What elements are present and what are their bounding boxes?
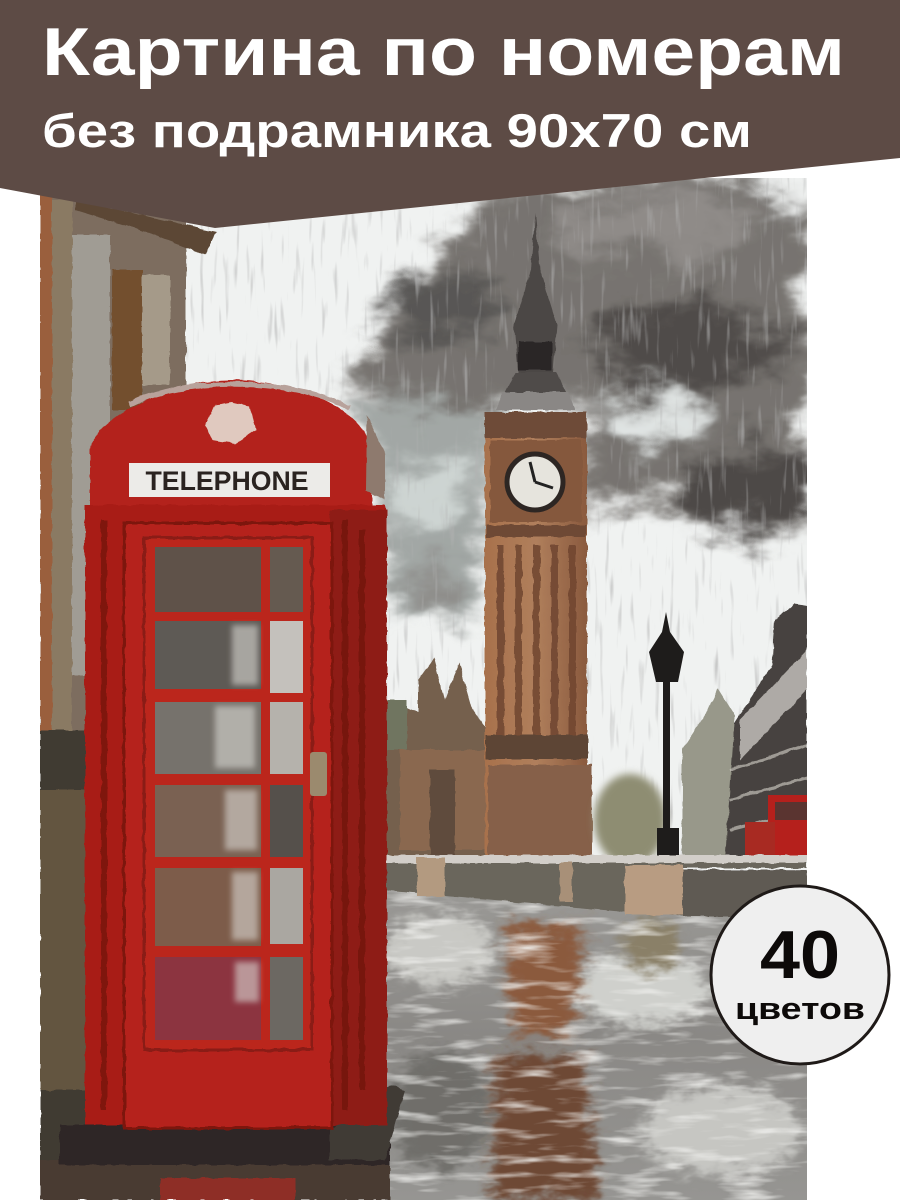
red telephone box	[40, 380, 405, 1200]
Big Ben tower	[485, 213, 592, 857]
window panes	[155, 547, 303, 1040]
title: Картина по номерам	[42, 14, 845, 90]
street lamp	[649, 612, 684, 860]
box base	[40, 1085, 405, 1200]
box body	[85, 380, 387, 1128]
tree behind wall	[594, 774, 666, 866]
right domed building	[682, 604, 807, 860]
sky	[40, 178, 807, 898]
badge: 40 colours	[711, 886, 889, 1064]
clock face	[507, 454, 563, 510]
embankment wall	[385, 855, 807, 916]
storm clouds	[345, 176, 820, 620]
red bus	[745, 795, 807, 860]
rain streaks over sky	[40, 178, 807, 878]
colours caption: цветов	[735, 991, 865, 1026]
wet pavement	[385, 870, 807, 1200]
painting: London phone box and Big Ben	[40, 176, 820, 1200]
left building	[40, 195, 216, 1200]
far palace	[385, 658, 490, 860]
subtitle: без подрамника 90х70 см	[42, 104, 752, 157]
door handle	[310, 752, 327, 796]
number of colours: 40	[760, 917, 840, 993]
telephone sign: TELEPHONE	[146, 466, 308, 496]
sign plate	[129, 463, 330, 497]
header banner	[0, 0, 900, 228]
